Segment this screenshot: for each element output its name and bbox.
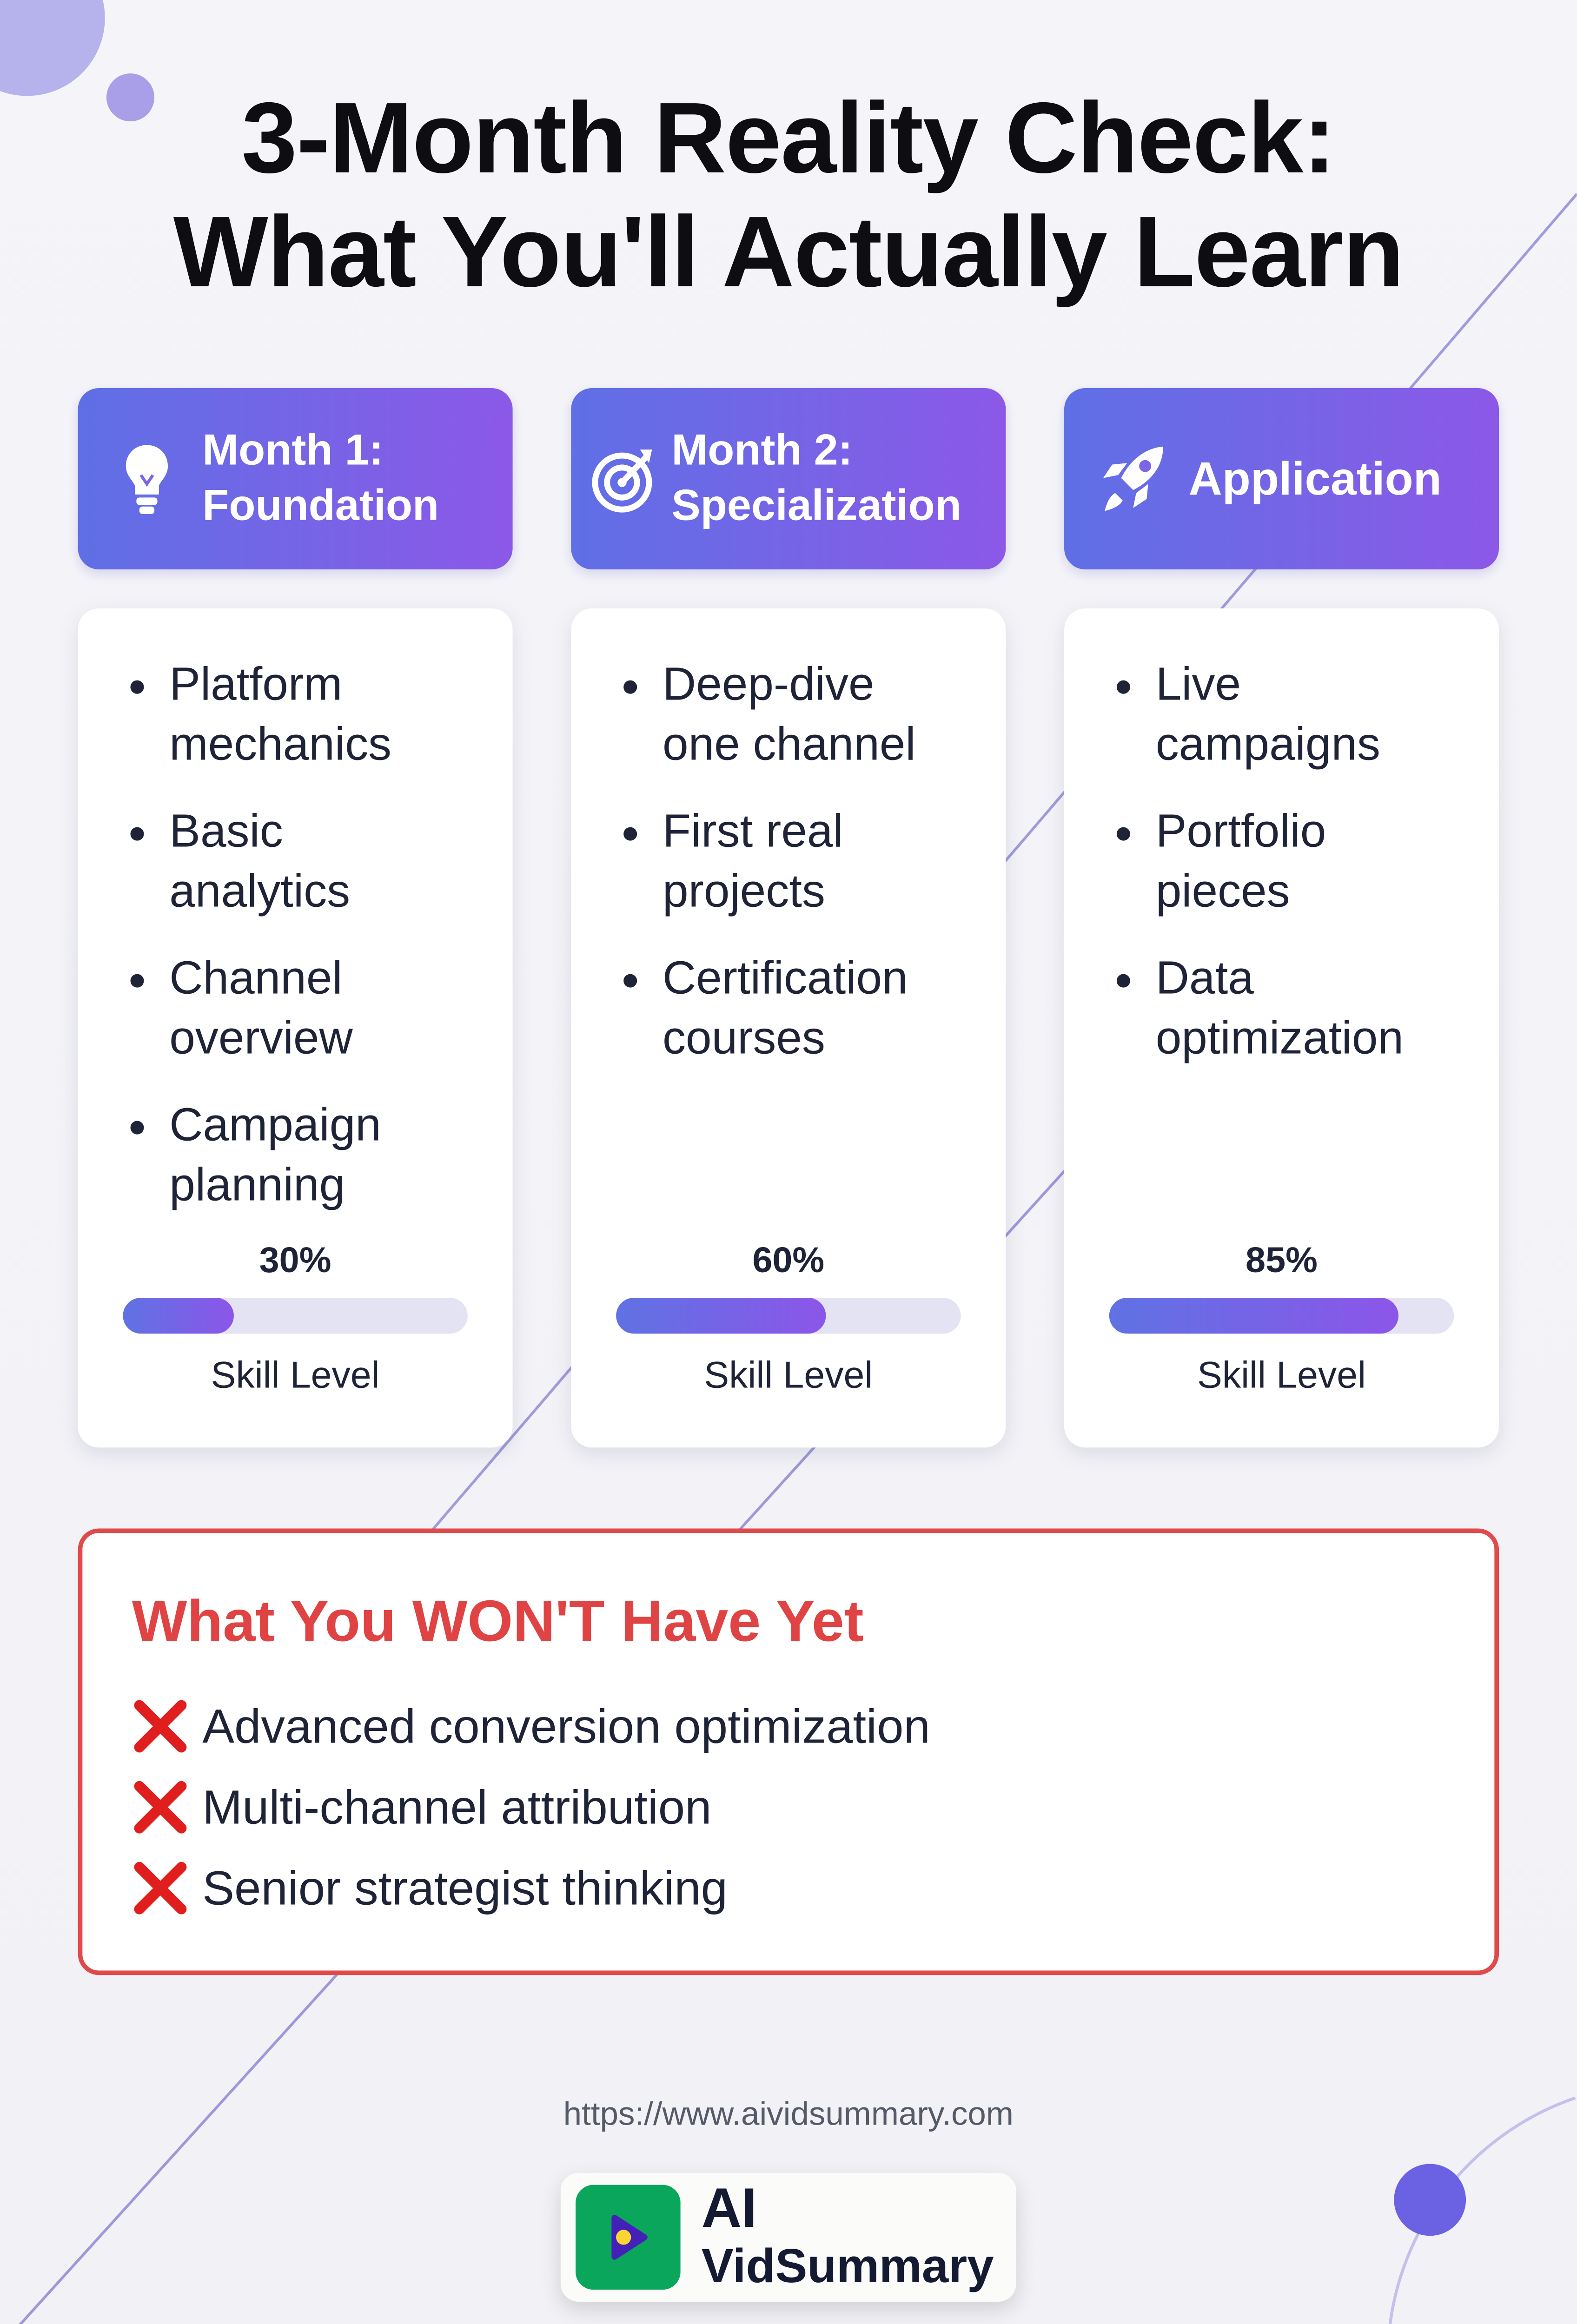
panel: application card: campaigns (1156, 717, 1380, 770)
panel: application card: Live (1156, 658, 1241, 710)
header: month 2: Specialization (671, 482, 961, 530)
panel: month 1 card: Platform (169, 658, 342, 710)
progress: 85% (1064, 608, 1499, 609)
icon: rocket (1097, 442, 1169, 517)
header: month 2 (571, 388, 1006, 569)
logo (561, 2173, 1016, 2302)
panel: month 1 card: overview (169, 1011, 353, 1063)
panel: month 2 card: Certification (663, 951, 908, 1004)
url: https://www.aividsummary.com (563, 2095, 1014, 2133)
icon: play (576, 2185, 681, 2290)
panel: application card: pieces (1156, 864, 1290, 916)
logo: VidSummary (702, 2239, 994, 2293)
panel: application card: Portfolio (1156, 805, 1326, 857)
title (0, 82, 1577, 310)
icon: target (589, 445, 658, 514)
item 1: Advanced conversion optimization (202, 1699, 930, 1753)
panel: application card: Data (1156, 951, 1254, 1004)
panel: month 2 card: Deep-dive (663, 658, 875, 710)
panel: month 2 card: Skill Level (704, 1354, 873, 1397)
header: month 2: Month 2: (671, 426, 853, 474)
progress: 60% (571, 608, 1006, 609)
panel: application card: 85% (1246, 1241, 1318, 1281)
panel: application card: Skill Level (1197, 1354, 1366, 1397)
panel: month 2 card: 60% (752, 1241, 824, 1281)
title: What You'll Actually Learn (173, 196, 1404, 309)
icon: lightbulb (123, 442, 171, 517)
panel: month 2 card: projects (663, 864, 825, 916)
header: month 1: Foundation (202, 482, 439, 530)
panel: month 2 card (571, 608, 1006, 1447)
panel: month 1 card: analytics (169, 864, 350, 916)
panel: application card: optimization (1156, 1011, 1404, 1063)
panel: what you won't have yet (78, 1528, 1499, 1975)
header: month 1 (78, 388, 513, 569)
progress: 30% (78, 608, 513, 609)
panel: month 1 card: planning (169, 1158, 345, 1210)
panel: month 2 card: one channel (663, 717, 916, 770)
panel: month 1 card: Campaign (169, 1098, 381, 1151)
panel: application card (1064, 608, 1499, 1447)
header: month 1: Month 1: (202, 426, 384, 474)
panel: month 1 card: mechanics (169, 717, 391, 770)
panel: month 2 card: First real (663, 805, 843, 857)
heading: What You WON'T Have Yet (132, 1590, 864, 1654)
panel: month 1 card: Channel (169, 951, 343, 1004)
header: application: Application (1189, 453, 1442, 505)
item 3: Senior strategist thinking (202, 1861, 728, 1915)
panel: month 1 card (78, 608, 513, 1447)
header: application (1064, 388, 1499, 569)
panel: month 1 card: Basic (169, 805, 283, 857)
logo: AI (702, 2177, 757, 2239)
title: 3-Month Reality Check: (241, 82, 1335, 195)
panel: month 1 card: 30% (259, 1241, 331, 1281)
item 2: Multi-channel attribution (202, 1780, 712, 1834)
panel: month 1 card: Skill Level (211, 1354, 380, 1397)
panel: month 2 card: courses (663, 1011, 825, 1063)
